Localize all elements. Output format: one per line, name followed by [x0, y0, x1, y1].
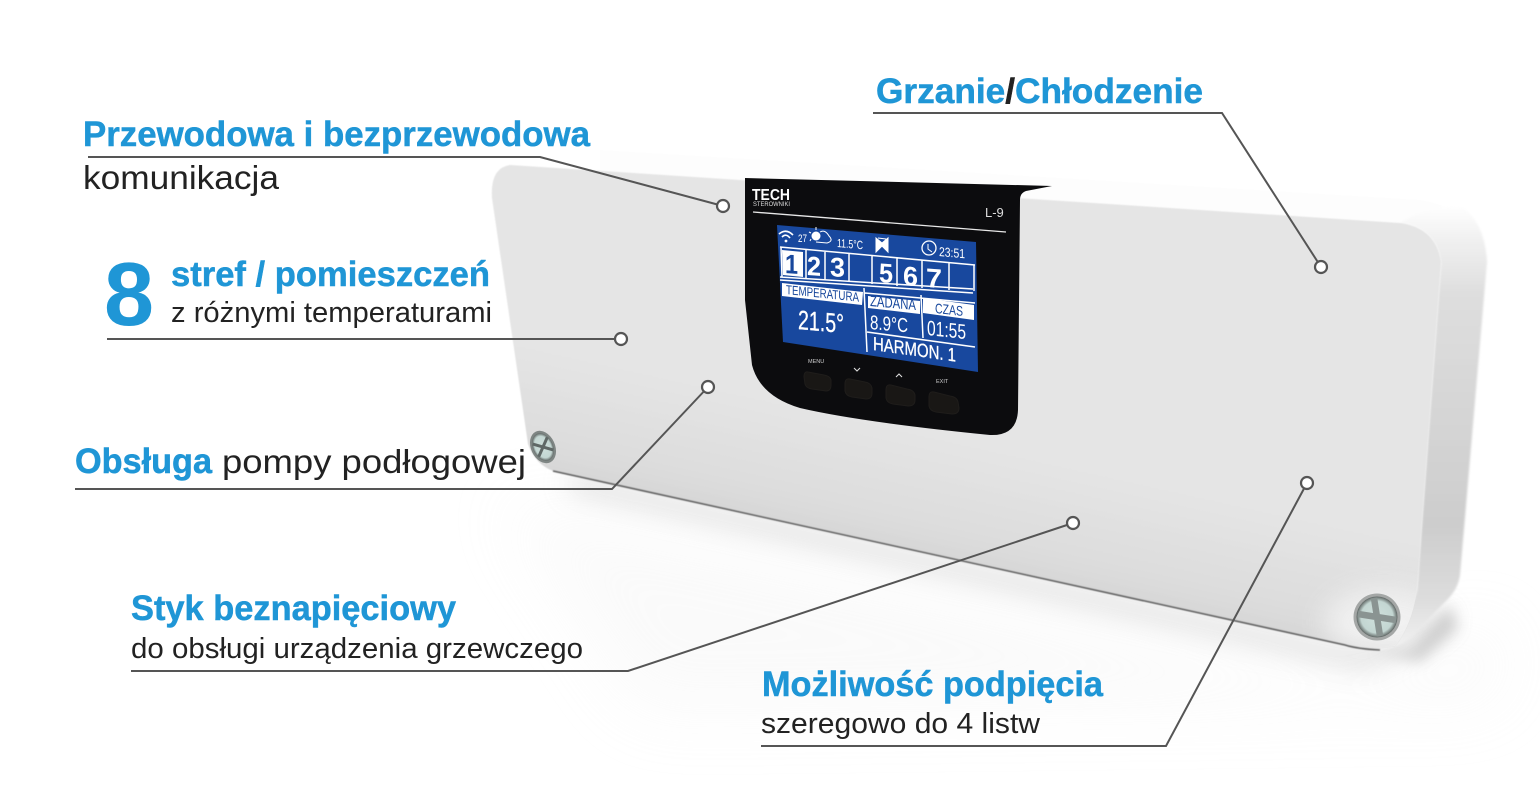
temperature: TEMPERATURA: [786, 282, 859, 305]
device: wall controller housing: [492, 150, 1487, 656]
zone boxes: 1: [785, 249, 798, 280]
zone boxes: 6: [903, 261, 918, 292]
setpoint: 8.9°C: [870, 312, 908, 337]
callout: Możliwość podpięcia: szeregowo do 4 listw: [761, 708, 1041, 740]
zone boxes: 7: [926, 263, 942, 294]
housing side: [1367, 205, 1487, 650]
screw right: [1354, 594, 1400, 640]
model label: L-9: [985, 205, 1004, 220]
callout: 8 stref / pomieszczeń: [104, 245, 627, 345]
time: [923, 298, 974, 344]
zone boxes: [780, 247, 975, 294]
zone boxes: 3: [830, 252, 845, 283]
logo TECH: TECH: [752, 187, 790, 204]
bright lower corner: [1323, 588, 1416, 648]
screw left: [525, 427, 561, 467]
callout: Obsługa pompy podłogowej: Obsługa: [75, 442, 213, 481]
lower grid lines: [864, 288, 975, 352]
callout: Obsługa pompy podłogowej: [75, 381, 714, 489]
callout: Styk beznapięciowy: Styk beznapięciowy: [131, 589, 457, 628]
callout: Możliwość podpięcia: Możliwość podpięcia: [762, 665, 1104, 704]
zone boxes: 2: [807, 251, 821, 282]
setpoint: [868, 293, 920, 337]
callout: 8 stref / pomieszczeń: z różnymi temperaturami: [171, 297, 492, 329]
callout: Obsługa pompy podłogowej: pompy podłogowej: [222, 443, 526, 480]
temperature: 21.5°: [798, 305, 844, 339]
logo TECH: STEROWNIKI: [753, 202, 790, 208]
control buttons: [804, 359, 959, 414]
callout: Styk beznapięciowy: [131, 517, 1079, 671]
status bar: [779, 227, 965, 261]
status bar: 27: [798, 233, 807, 245]
control buttons: EXIT: [936, 379, 949, 385]
callout: Grzanie/Chłodzenie: Grzanie/Chłodzenie: [876, 72, 1203, 111]
front face: [492, 165, 1441, 650]
schedule: HARMON. 1: [873, 334, 956, 367]
callout: Przewodowa i bezprzewodowa: komunikacja: [83, 159, 280, 196]
callout: Przewodowa i bezprzewodowa: [83, 115, 729, 212]
callout: Przewodowa i bezprzewodowa: Przewodowa i bezprzewodowa: [83, 115, 591, 154]
control buttons: MENU: [808, 359, 824, 365]
LCD screen: [777, 225, 978, 372]
housing top: [600, 150, 1487, 300]
zone boxes: 5: [879, 258, 893, 289]
status bar: 23:51: [939, 244, 965, 261]
setpoint: ZADANA: [870, 293, 916, 314]
callout: Możliwość podpięcia: [761, 477, 1313, 746]
callout: 8 stref / pomieszczeń: stref / pomieszczeń: [171, 255, 490, 294]
floor shadow: [500, 482, 1500, 710]
time: 01:55: [927, 317, 966, 344]
bottom edge: [553, 471, 1380, 650]
front panel black bezel: [745, 178, 1052, 435]
status bar: 11.5°C: [837, 236, 863, 252]
callout: 8 stref / pomieszczeń: 8: [104, 245, 154, 345]
time: CZAS: [935, 300, 963, 319]
bezel divider: [753, 212, 1006, 232]
callout: Grzanie/Chłodzenie: [873, 72, 1327, 273]
callout: Styk beznapięciowy: do obsługi urządzenia grzewczego: [131, 633, 583, 665]
temperature: [782, 282, 863, 339]
